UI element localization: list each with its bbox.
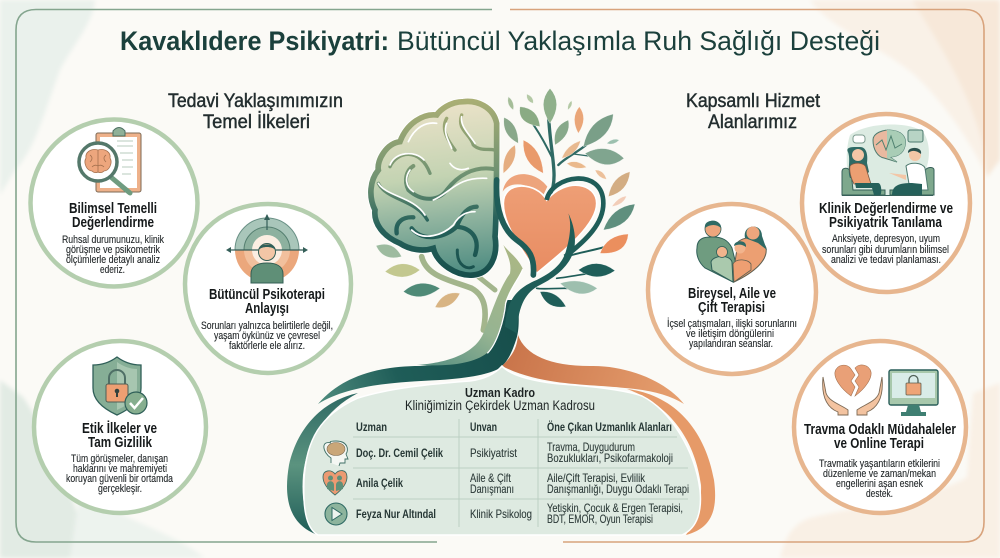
panel: expert team table: [304, 366, 700, 535]
frame: green half: [16, 10, 492, 542]
table row: Feyza Nur Altındal: Yetişkin, Çocuk & Ergen Terapisi,: [547, 501, 683, 515]
text: ethics and confidentiality: haklarını ve mahremiyeti: [73, 463, 167, 475]
text: individual family couples therapy: [667, 286, 797, 350]
text: clinical assessment: Anksiyete, depresyon, uyum: [832, 233, 940, 245]
heading: treatment principles: Temel İlkeleri: [203, 110, 310, 133]
text: holistic psychotherapy: Sorunları yalnızca belirtilerle değil,: [201, 320, 333, 332]
icon: person in concentric arcs: [226, 214, 308, 283]
text: clinical assessment: [819, 201, 953, 266]
title: Bütüncül Yaklaşımla Ruh Sağlığı Desteği: [397, 26, 880, 56]
text: trauma and online therapy: Travma Odaklı Müdahaleler: [804, 422, 956, 438]
table heading: Kliniğimizin Çekirdek Uzman Kadrosu: [405, 398, 595, 413]
brain: [371, 101, 534, 275]
table row: Anila Çelik: Danışmanlığı, Duygu Odaklı Terapi: [547, 482, 689, 496]
icon: family heart: [697, 221, 767, 282]
table row: Cemil Çelik: Bozuklukları, Psikofarmakoloji: [547, 451, 673, 465]
text: trauma and online therapy: destek.: [866, 488, 893, 500]
table row: Anila Çelik: Aile/Çift Terapisi, Evlilik: [547, 471, 646, 485]
heading: service areas: Kapsamlı Hizmet: [686, 90, 821, 112]
text: ethics and confidentiality: Tam Gizlilik: [88, 435, 153, 451]
frame: orange half: [510, 10, 984, 542]
table row: Cemil Çelik: [356, 440, 673, 465]
text: holistic psychotherapy: [201, 287, 333, 352]
text: ethics and confidentiality: Tüm görüşmeler, danışan: [71, 453, 168, 465]
text: ethics and confidentiality: [66, 420, 174, 495]
table row: Cemil Çelik: Travma, Duygudurum: [547, 440, 635, 454]
text: scientific assessment: Değerlendirme: [72, 215, 154, 231]
text: holistic psychotherapy: Bütüncül Psikoterapi: [209, 287, 325, 303]
text: holistic psychotherapy: faktörlerle ele alırız.: [229, 340, 305, 352]
panel: holistic psychotherapy: [185, 204, 351, 373]
table row: Anila Çelik: Aile & Çift: [470, 471, 512, 485]
table row: Anila Çelik: Anila Çelik: [356, 476, 403, 490]
tree branches: [422, 107, 615, 330]
table row: Cemil Çelik: Doç. Dr. Cemil Çelik: [356, 446, 443, 460]
title: Kavaklıdere Psikiyatri:: [120, 26, 389, 56]
table row: Anila Çelik: [356, 471, 689, 496]
icon: play button: [325, 503, 347, 525]
tree leaves: [376, 88, 635, 308]
text: scientific assessment: ederiz.: [100, 264, 125, 276]
table row: Feyza Nur Altındal: Klinik Psikolog: [470, 507, 532, 521]
text: clinical assessment: Klinik Değerlendirme ve: [819, 201, 953, 217]
roots: [287, 300, 715, 535]
text: scientific assessment: [62, 201, 164, 276]
icon: patient and doctor consultation: [842, 124, 934, 196]
text: scientific assessment: Ruhsal durumunuzu, klinik: [62, 234, 164, 246]
text: holistic psychotherapy: Anlayışı: [245, 301, 289, 317]
text: scientific assessment: ölçümlerle detaylı analiz: [66, 254, 160, 266]
text: ethics and confidentiality: Etik İlkeler ve: [82, 420, 157, 437]
panel: trauma and online therapy: [794, 341, 966, 513]
icon: shield with lock: [93, 357, 147, 415]
icon: head with brain: [324, 441, 348, 466]
text: clinical assessment: sorunları gibi durumların bilimsel: [822, 244, 949, 256]
table row: Feyza Nur Altındal: Feyza Nur Altındal: [356, 507, 436, 521]
heading: service areas: [686, 90, 821, 133]
table header row: Uzman: [356, 420, 387, 434]
table grid: [353, 419, 688, 527]
text: ethics and confidentiality: gerçekleşir.: [98, 483, 142, 495]
text: individual family couples therapy: ve iletişim döngülerini: [686, 328, 774, 340]
table row: Cemil Çelik: Psikiyatrist: [470, 446, 518, 460]
table header row: Öne Çıkan Uzmanlık Alanları: [547, 419, 672, 434]
table heading: Uzman Kadro: [465, 385, 535, 400]
table header row: [356, 419, 672, 434]
icon: heart with two people: [323, 471, 347, 495]
heading: service areas: Alanlarımız: [708, 111, 797, 133]
text: trauma and online therapy: ve Online Terapi: [834, 436, 924, 452]
illustration: brain heart tree: [371, 88, 635, 365]
table row: Feyza Nur Altındal: BDT, EMOR, Oyun Terapisi: [547, 512, 653, 526]
table heading: [405, 385, 595, 413]
panel: clinical assessment: [802, 114, 970, 292]
text: individual family couples therapy: yapılandıran seanslar.: [689, 338, 773, 350]
text: trauma and online therapy: engellerini aşan esnek: [836, 478, 923, 490]
text: trauma and online therapy: Travmatik yaşantıların etkilerini: [819, 458, 940, 470]
text: individual family couples therapy: Bireysel, Aile ve: [688, 286, 776, 302]
text: clinical assessment: Psikiyatrik Tanılama: [829, 215, 943, 231]
panel: ethics and confidentiality: [34, 341, 206, 513]
text: individual family couples therapy: Çift Terapisi: [698, 300, 765, 316]
panel: scientific assessment: [30, 120, 198, 286]
text: trauma and online therapy: [804, 422, 956, 500]
text: scientific assessment: Bilimsel Temelli: [69, 201, 157, 217]
heading: treatment principles: [168, 90, 343, 133]
text: clinical assessment: analizi ve tedavi planlaması.: [831, 254, 941, 266]
icon: monitor with lock: [889, 370, 938, 416]
tree trunk: [417, 213, 575, 365]
text: ethics and confidentiality: koruyan güvenli bir ortamda: [66, 473, 174, 485]
table row: Anila Çelik: Danışmanı: [470, 482, 514, 496]
icon: clipboard and magnifier: [79, 128, 141, 193]
table row: Feyza Nur Altındal: [356, 501, 683, 526]
text: trauma and online therapy: düzenleme ve zaman/mekan: [823, 468, 936, 480]
text: individual family couples therapy: İçsel çatışmaları, ilişki sorunlarını: [667, 317, 797, 330]
icon: broken heart in hands: [823, 365, 882, 415]
table header row: Unvan: [470, 420, 497, 434]
heart: [503, 174, 603, 273]
title: [120, 26, 880, 56]
text: holistic psychotherapy: yaşam öykünüz ve çevresel: [214, 330, 320, 342]
text: scientific assessment: görüşme ve psikometrik: [66, 244, 160, 256]
heading: treatment principles: Tedavi Yaklaşımımızın: [168, 90, 343, 112]
panel: individual family couples therapy: [648, 204, 816, 374]
